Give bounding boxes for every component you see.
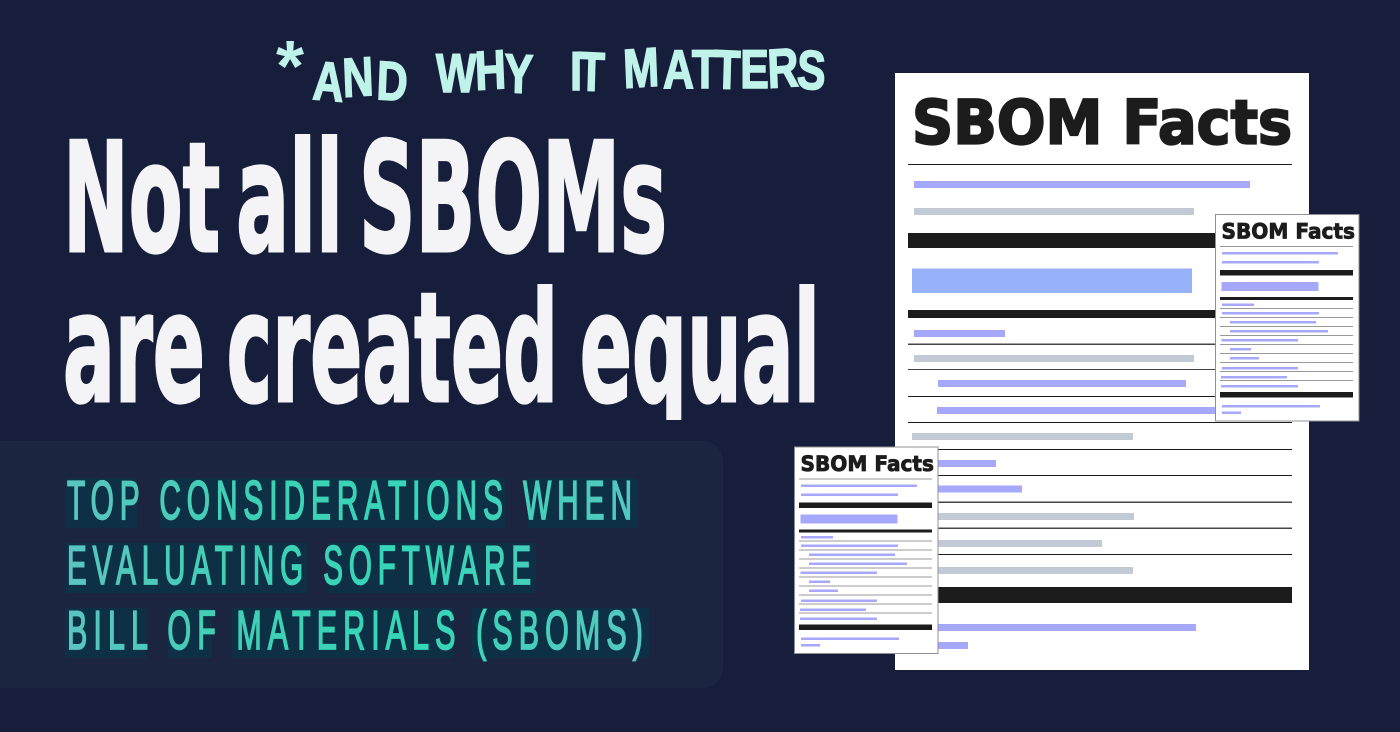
handwritten note: and why it matters — [276, 27, 827, 114]
small heading: SBOM Facts — [1222, 220, 1355, 244]
title — [66, 134, 814, 420]
subtitle text: EVALUATING SOFTWARE — [67, 534, 537, 596]
small heading: SBOM Facts — [800, 452, 934, 476]
small facts rows — [1220, 246, 1353, 414]
subtitle text — [67, 469, 649, 661]
asterisk: * — [276, 27, 304, 107]
title line 1: Not all SBOMs — [63, 110, 667, 287]
document sheet — [895, 73, 1309, 670]
small SBOM Facts document, right — [1216, 214, 1359, 421]
main SBOM Facts document — [895, 73, 1309, 670]
small sheet — [1216, 214, 1359, 421]
small sheet — [794, 447, 938, 654]
panel background — [0, 441, 723, 688]
facts rows — [908, 181, 1292, 649]
subtitle text: BILL OF MATERIALS (SBOMS) — [67, 599, 649, 661]
document heading: SBOM Facts — [912, 88, 1292, 158]
small SBOM Facts document, left — [794, 447, 938, 654]
subtitle text: TOP CONSIDERATIONS WHEN — [67, 469, 638, 531]
panel: subtitle — [0, 441, 723, 688]
brush lettering: AND WHY IT MATTERS — [311, 37, 827, 114]
small facts rows — [799, 478, 932, 646]
